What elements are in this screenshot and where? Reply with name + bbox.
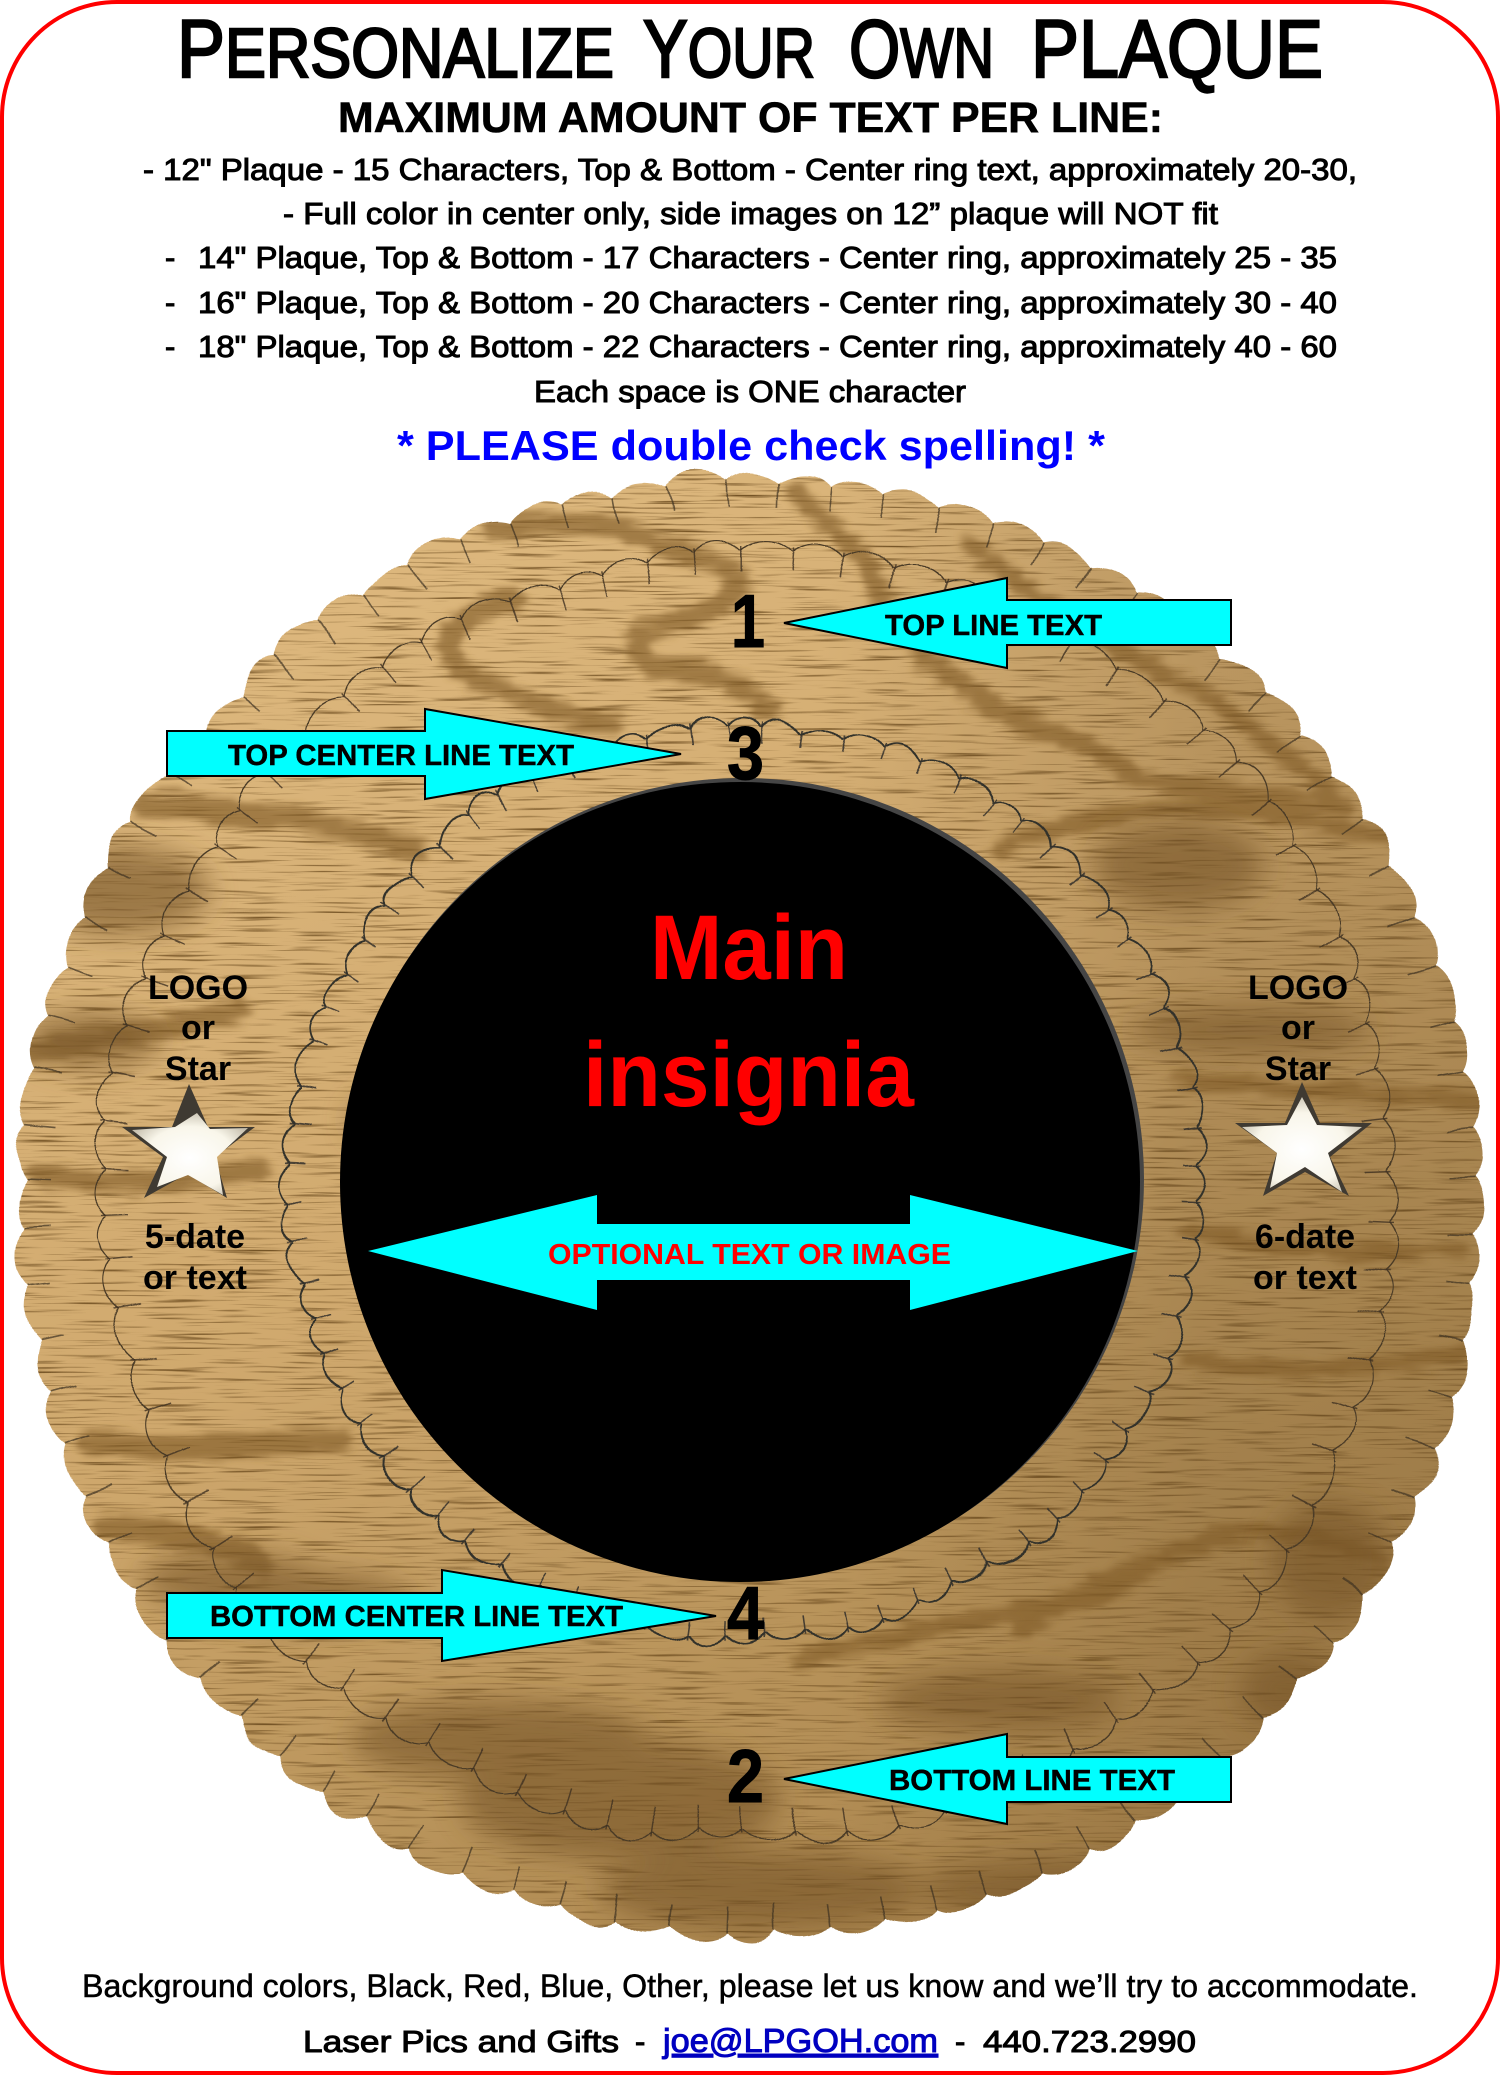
icon: right star bbox=[1235, 1082, 1372, 1196]
double arrow: optional text or image: OPTIONAL TEXT OR IMAGE bbox=[548, 1239, 951, 1271]
arrow: top line text: TOP LINE TEXT bbox=[885, 610, 1102, 642]
right logo label: or bbox=[1281, 1009, 1315, 1047]
outer scalloped ring bbox=[118, 564, 1382, 1828]
contact line: - bbox=[635, 2024, 645, 2059]
arrow: top center line text bbox=[167, 709, 681, 799]
right logo label: LOGO bbox=[1248, 969, 1348, 1007]
contact line bbox=[303, 2022, 1196, 2059]
arrow: top center line text: TOP CENTER LINE TEXT bbox=[228, 740, 574, 772]
arrow: bottom line text bbox=[784, 1734, 1231, 1824]
arrow: top line text bbox=[784, 578, 1231, 668]
number 3: 3 bbox=[727, 711, 764, 795]
contact line: - bbox=[955, 2024, 965, 2059]
icon: left star bbox=[122, 1084, 255, 1198]
number 1: 1 bbox=[731, 579, 765, 663]
size rules text block: - Full color in center only, side images on 12” plaque will NOT fit bbox=[283, 196, 1218, 231]
contact line: joe@LPGOH.com bbox=[662, 2022, 938, 2059]
left date label: or text bbox=[143, 1259, 247, 1297]
outer edge ticks bbox=[38, 495, 1462, 1919]
main insignia text bbox=[583, 897, 915, 1126]
right date label: 6-date bbox=[1255, 1218, 1355, 1256]
left logo label: LOGO bbox=[148, 969, 248, 1007]
main insignia text: Main bbox=[650, 897, 848, 999]
size rules text block: 16" Plaque, Top & Bottom - 20 Characters - Center ring, approximately 30 - 40 bbox=[198, 285, 1337, 320]
left date label bbox=[143, 1218, 247, 1297]
footer note: Background colors, Black, Red, Blue, Other, please let us know and we’ll try to accommodate. bbox=[82, 1968, 1418, 2004]
central black insignia circle bbox=[340, 778, 1144, 1582]
title: PERSONALIZE bbox=[177, 4, 614, 95]
number 4: 4 bbox=[727, 1571, 764, 1655]
right logo label bbox=[1248, 969, 1348, 1088]
right date label bbox=[1253, 1218, 1357, 1297]
left logo label: Star bbox=[165, 1050, 231, 1088]
inner scalloped ring bbox=[297, 733, 1195, 1631]
size rules text block: 18" Plaque, Top & Bottom - 22 Characters - Center ring, approximately 40 - 60 bbox=[198, 329, 1337, 364]
subheading: MAXIMUM AMOUNT OF TEXT PER LINE: bbox=[338, 94, 1163, 142]
size rules text block: - bbox=[165, 329, 175, 364]
title: OWN bbox=[849, 4, 994, 95]
left logo label: or bbox=[181, 1009, 215, 1047]
contact line: 440.723.2990 bbox=[983, 2024, 1196, 2059]
main insignia text: insignia bbox=[583, 1024, 915, 1126]
size rules text block: Each space is ONE character bbox=[534, 374, 966, 409]
size rules text block: 14" Plaque, Top & Bottom - 17 Characters - Center ring, approximately 25 - 35 bbox=[198, 240, 1337, 275]
arrow: bottom center line text bbox=[167, 1570, 716, 1661]
right date label: or text bbox=[1253, 1259, 1357, 1297]
size rules text block: - bbox=[165, 240, 175, 275]
title: YOUR bbox=[643, 4, 815, 95]
title: PLAQUE bbox=[1031, 4, 1323, 95]
left logo label bbox=[148, 969, 248, 1088]
right logo label: Star bbox=[1265, 1050, 1331, 1088]
spelling warning: * PLEASE double check spelling! * bbox=[397, 422, 1106, 469]
title bbox=[177, 4, 1323, 95]
arrow: bottom line text: BOTTOM LINE TEXT bbox=[889, 1765, 1175, 1797]
size rules text block: - 12" Plaque - 15 Characters, Top & Bottom - Center ring text, approximately 20-30, bbox=[143, 152, 1357, 187]
arrow: bottom center line text: BOTTOM CENTER LINE TEXT bbox=[210, 1601, 623, 1633]
double arrow: optional text or image bbox=[368, 1195, 1138, 1310]
wooden plaque bbox=[0, 450, 1500, 1970]
number 2: 2 bbox=[727, 1734, 764, 1818]
size rules text block: - bbox=[165, 285, 175, 320]
contact line: Laser Pics and Gifts bbox=[303, 2024, 619, 2059]
left date label: 5-date bbox=[145, 1218, 245, 1256]
size rules text block bbox=[143, 152, 1357, 409]
